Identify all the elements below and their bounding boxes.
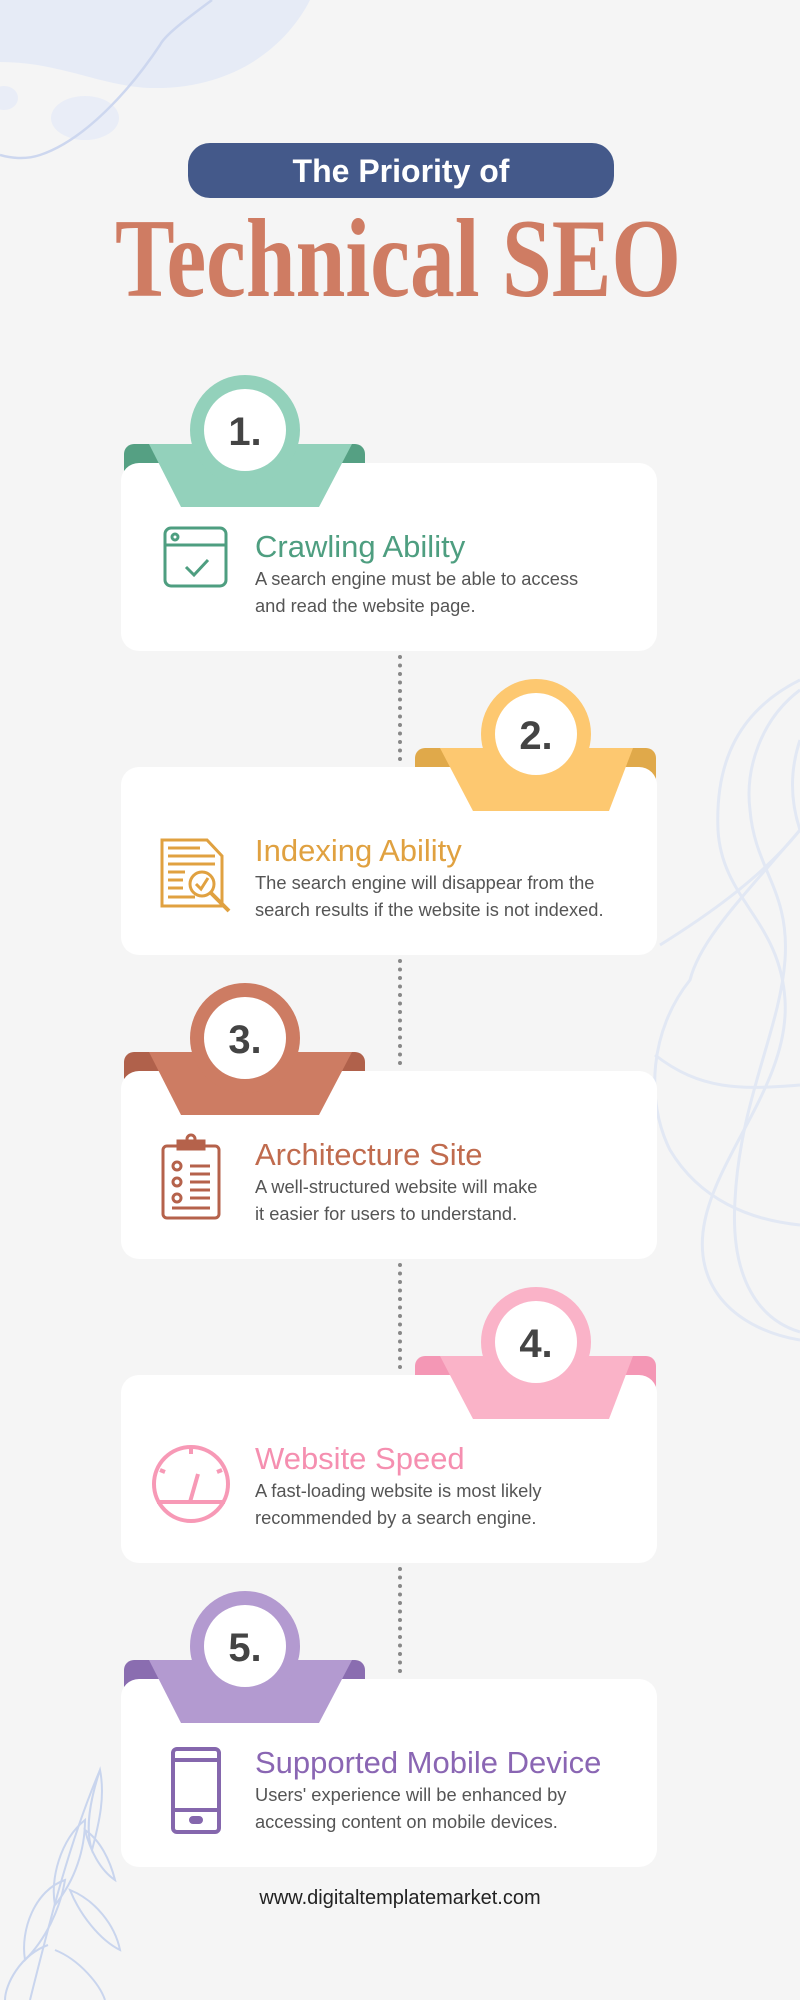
heading 2: Indexing Ability [255, 833, 462, 868]
tab 5: 5. [228, 1626, 262, 1670]
panel 5: Supported Mobile Device [121, 1591, 657, 1867]
title pill: The Priority of [188, 143, 614, 198]
panel 4: Website Speed [121, 1287, 657, 1563]
text 5: accessing content on mobile devices. [255, 1811, 558, 1832]
tab 1 [149, 375, 352, 507]
heading 5: Supported Mobile Device [255, 1745, 601, 1780]
decoration: top-left blob [0, 0, 310, 158]
icon: document search [162, 840, 229, 911]
text 1: and read the website page. [255, 595, 476, 616]
footer url: www.digitaltemplatemarket.com [258, 1887, 541, 1909]
text 3: A well-structured website will make [255, 1176, 537, 1197]
tab 2 [440, 679, 633, 811]
icon: clipboard checklist [163, 1135, 219, 1218]
dotted connectors [398, 657, 402, 1677]
tab 5 [149, 1591, 352, 1723]
title pill: The Priority of: The Priority of [293, 153, 510, 189]
heading 3: Architecture Site [255, 1137, 482, 1172]
decoration: leaf bottom-left [5, 1770, 120, 2000]
tab 3: 3. [228, 1018, 262, 1062]
tab 1: 1. [228, 410, 262, 454]
panel 1: Crawling Ability [121, 375, 657, 651]
heading 1: Crawling Ability [255, 529, 466, 564]
text 4: A fast-loading website is most likely [255, 1480, 542, 1501]
decoration: right curves [655, 680, 800, 1340]
icon: browser check [165, 528, 226, 586]
text 1: A search engine must be able to access [255, 568, 578, 589]
icon: mobile phone [173, 1749, 219, 1832]
text 4: recommended by a search engine. [255, 1507, 536, 1528]
tab 2: 2. [519, 714, 553, 758]
tab 3 [149, 983, 352, 1115]
text 2: search results if the website is not indexed. [255, 899, 604, 920]
panel 2: Indexing Ability [121, 679, 657, 955]
tab 4 [440, 1287, 633, 1419]
panel 3: Architecture Site [121, 983, 657, 1259]
heading 4: Website Speed [255, 1441, 465, 1476]
icon: speedometer [154, 1447, 228, 1521]
tab 4: 4. [519, 1322, 553, 1366]
text 3: it easier for users to understand. [255, 1203, 517, 1224]
text 2: The search engine will disappear from the [255, 872, 594, 893]
text 5: Users' experience will be enhanced by [255, 1784, 567, 1805]
